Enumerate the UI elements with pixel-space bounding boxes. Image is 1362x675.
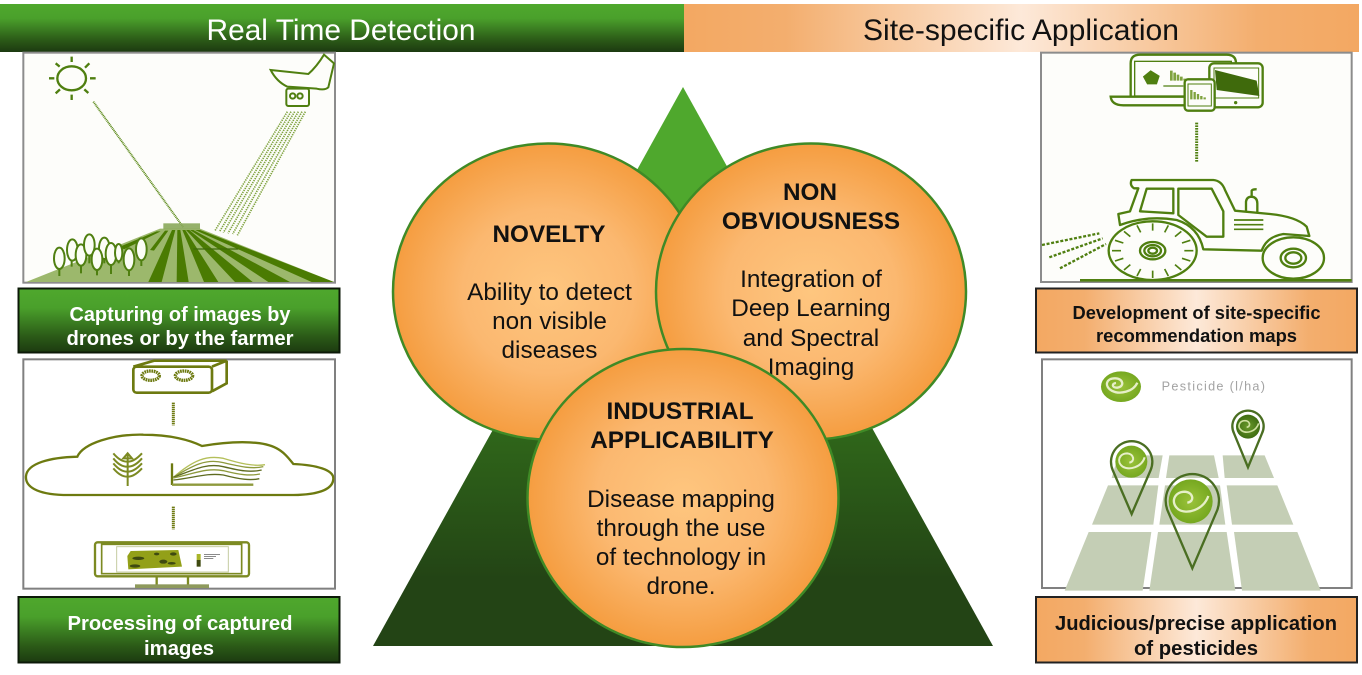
circle: non obviousness <box>656 144 966 440</box>
circle: non obviousness: Imaging <box>768 354 854 381</box>
circle: industrial applicability: of technology in <box>596 544 766 571</box>
icon: phone <box>1185 79 1215 111</box>
connector <box>169 507 178 529</box>
legend icon <box>1101 371 1141 402</box>
circle: novelty: diseases <box>502 337 597 364</box>
caption: development of recommendation maps: Development of site-specific <box>1072 302 1320 323</box>
header: Real Time Detection <box>0 4 684 52</box>
circle: non obviousness: Deep Learning <box>731 295 891 322</box>
panel: devices and tractor illustration <box>1041 53 1352 282</box>
circle: non obviousness: OBVIOUSNESS <box>722 208 900 235</box>
caption: capturing of images <box>18 288 340 352</box>
sun ray <box>93 102 183 227</box>
circle: novelty: Ability to detect <box>467 279 632 306</box>
pin: centre <box>1166 474 1219 568</box>
icon: monitor with map <box>95 542 249 588</box>
circle: novelty: non visible <box>492 308 607 335</box>
circle: industrial applicability: drone. <box>647 573 715 600</box>
circle: novelty: NOVELTY <box>493 221 605 248</box>
circle: industrial applicability: through the use <box>597 515 765 542</box>
caption: processing of captured images: images <box>144 638 214 660</box>
field hill <box>26 223 334 282</box>
circle: industrial applicability: Disease mapping <box>587 486 775 513</box>
caption: processing of captured images <box>18 597 340 662</box>
panel: sun and drone capture illustration <box>23 53 335 283</box>
panel: pesticide map illustration <box>1042 359 1352 591</box>
reflected light beams <box>215 112 305 235</box>
icon: tablet <box>1209 63 1263 107</box>
icon: tractor <box>1109 180 1324 280</box>
central triangle <box>373 87 993 646</box>
ground <box>1080 276 1352 284</box>
caption: development of recommendation maps: recommendation maps <box>1096 325 1297 346</box>
pin: left <box>1111 441 1152 514</box>
field grid <box>1065 455 1321 591</box>
circle: non obviousness: NON <box>783 179 837 206</box>
header: Site-specific Application <box>684 4 1359 52</box>
circle: industrial applicability: APPLICABILITY <box>590 427 774 454</box>
icon: camera <box>133 361 227 393</box>
icon: drone camera <box>286 89 309 106</box>
icon: drone wing <box>271 55 334 89</box>
connector <box>169 403 178 425</box>
pin: top right <box>1232 411 1264 467</box>
circle: non obviousness: Integration of <box>740 266 882 293</box>
caption: judicious application of pesticides <box>1036 597 1357 662</box>
circle: industrial applicability: INDUSTRIAL <box>606 398 754 425</box>
caption: judicious application of pesticides: Judicious/precise application <box>1055 613 1337 635</box>
panel: image processing illustration <box>23 359 335 589</box>
circle: novelty <box>393 144 703 440</box>
icon: laptop <box>1111 55 1236 105</box>
caption: development of recommendation maps <box>1036 288 1357 352</box>
caption: capturing of images: drones or by the farmer <box>66 328 294 350</box>
header: Real Time Detection: Real Time Detection <box>206 14 476 47</box>
legend label: Pesticide (l/ha) <box>1162 380 1265 394</box>
icon: sun <box>49 57 96 100</box>
icon: cloud <box>26 435 333 495</box>
caption: processing of captured images: Processing of captured <box>68 613 292 635</box>
caption: capturing of images: Capturing of images by <box>70 304 291 326</box>
spray <box>1042 233 1106 268</box>
circle: industrial applicability <box>528 349 838 647</box>
header: Site-specific Application: Site-specific Application <box>863 14 1179 47</box>
trees <box>54 234 147 276</box>
caption: judicious application of pesticides: of pesticides <box>1134 638 1258 660</box>
icon: wheat plant <box>113 453 142 486</box>
spectral chart <box>172 457 265 485</box>
connector <box>1192 123 1201 162</box>
circle: non obviousness: and Spectral <box>743 325 879 352</box>
